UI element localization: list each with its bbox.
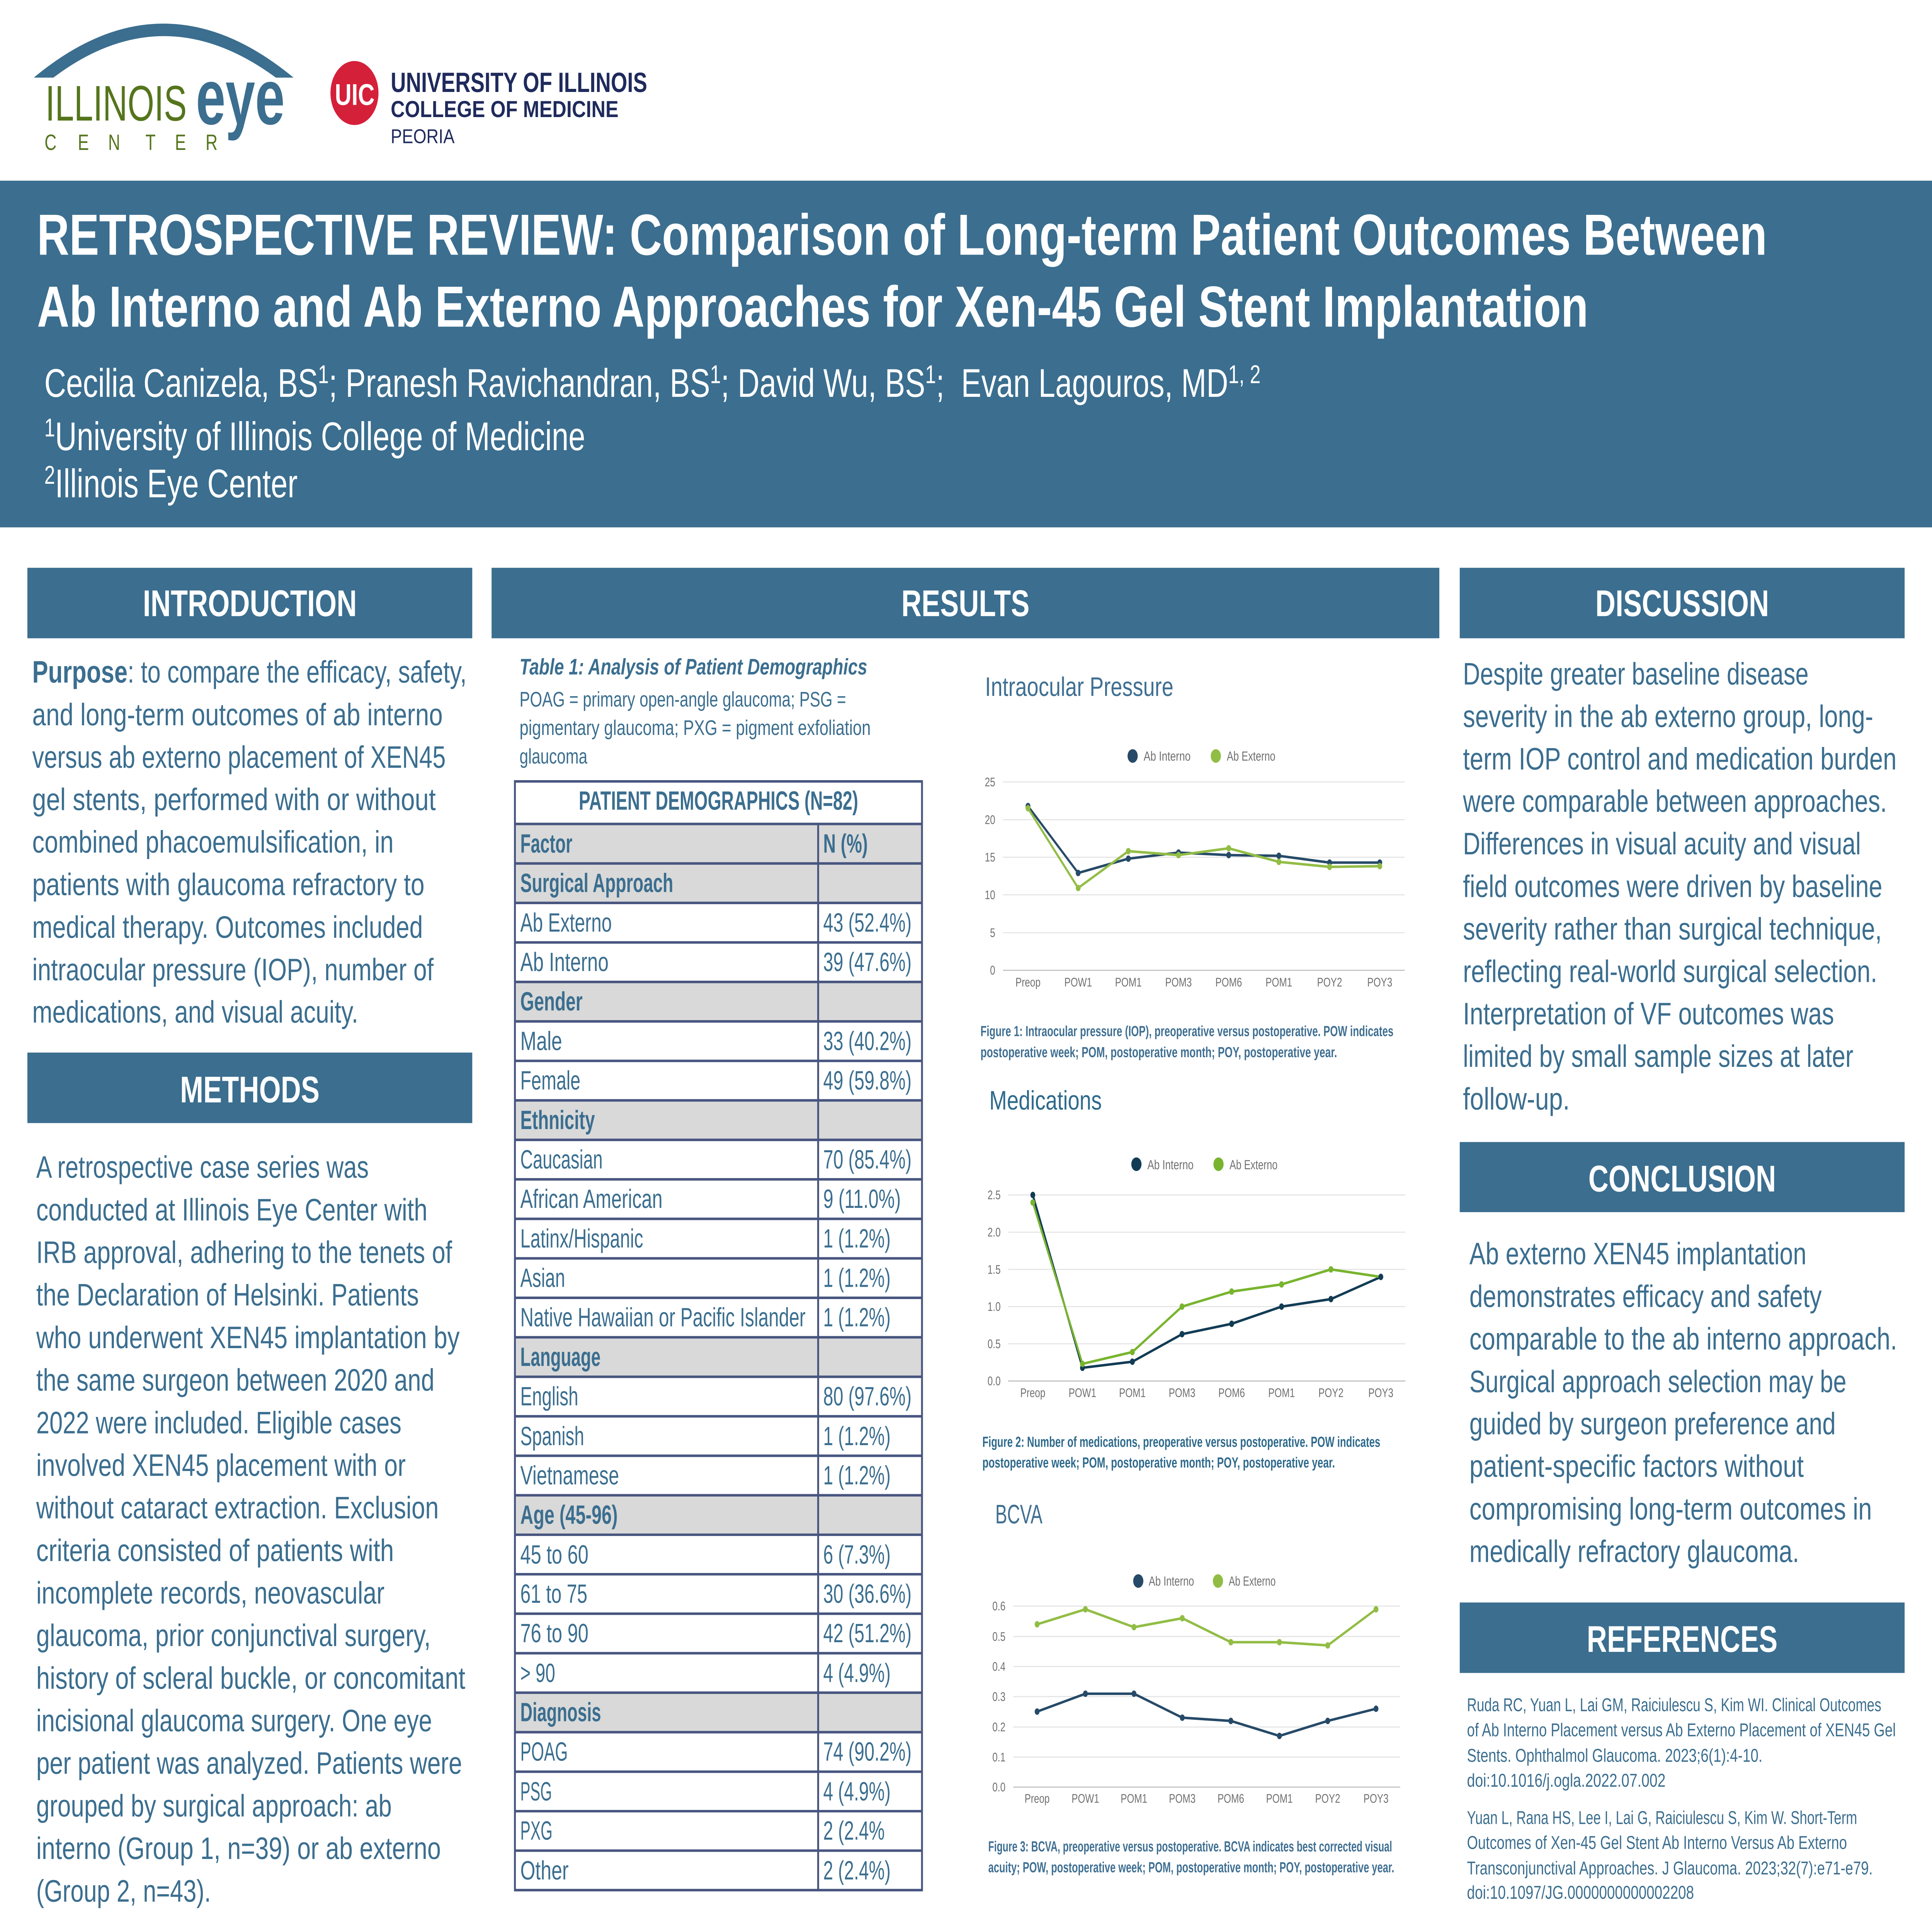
affiliation 2: Illinois Eye Center [55, 461, 298, 506]
logo: Illinois Eye Center [34, 24, 294, 155]
table: patient demographics: 1 (1.2%) [823, 1461, 891, 1490]
text: discussion: Differences in visual acuity and visual [1463, 827, 1861, 861]
table: patient demographics: Age (45-96) [520, 1500, 618, 1529]
panel: intraocular pressure chart: Intraocular Pressure [985, 672, 1173, 702]
table: patient demographics: Vietnamese [520, 1461, 619, 1490]
legend: Ab Interno [1144, 749, 1190, 764]
axis labels: Preop [1015, 975, 1041, 989]
axis labels: 0.5 [988, 1337, 1001, 1351]
axis labels: 0.1 [992, 1750, 1005, 1764]
table: patient demographics: 39 (47.6%) [823, 947, 912, 977]
axis labels: 15 [985, 850, 995, 864]
table: patient demographics: Gender [520, 986, 583, 1016]
panel: BCVA chart: BCVA [995, 1499, 1043, 1529]
table: patient demographics: Female [520, 1065, 580, 1095]
authors: ; Pranesh Ravichandran, BS [329, 361, 710, 405]
table: patient demographics: Language [520, 1342, 600, 1372]
axis labels: 0.0 [988, 1374, 1001, 1388]
text: discussion [1463, 656, 1896, 1116]
legend: Ab Interno [1147, 1157, 1194, 1172]
axis labels: 0.3 [992, 1690, 1005, 1704]
table: patient demographics: N (%) [823, 828, 868, 858]
text: methods: interno (Group 1, n=39) or ab externo [36, 1831, 441, 1866]
legend [1128, 749, 1276, 764]
text: conclusion: guided by surgeon preference and [1469, 1406, 1836, 1441]
text: purpose: and long-term outcomes of ab interno [32, 697, 443, 732]
text: purpose: intraocular pressure (IOP), number of [32, 952, 434, 987]
text: methods: IRB approval, adhering to the tenets of [36, 1235, 452, 1270]
text: conclusion [1469, 1236, 1897, 1569]
table title and note: Table 1: Analysis of Patient Demographics [519, 655, 867, 679]
table: patient demographics: 45 to 60 [520, 1539, 588, 1569]
caption: figure 1: Figure 1: Intraocular pressure (IOP), preoperative versus postoperative. POW indicates [981, 1023, 1393, 1039]
caption: figure 1 [981, 1023, 1393, 1060]
heading: methods: METHODS [180, 1069, 320, 1111]
table: patient demographics: Ethnicity [520, 1105, 595, 1135]
axis labels: POY3 [1367, 975, 1392, 989]
text: methods: grouped by surgical approach: ab [36, 1789, 392, 1823]
table: patient demographics: 1 (1.2%) [823, 1224, 891, 1253]
text: discussion: severity in the ab externo group, long- [1463, 699, 1873, 734]
logo: Illinois Eye Center: CENTER [44, 130, 218, 155]
axis labels: 0.0 [992, 1780, 1005, 1794]
text: discussion: limited by small sample sizes at later [1463, 1039, 1854, 1074]
table: patient demographics: Spanish [520, 1421, 584, 1451]
table: patient demographics: 1 (1.2%) [823, 1302, 891, 1332]
axis labels: 1.0 [988, 1300, 1001, 1314]
logo: Illinois Eye Center: ILLINOIS [45, 75, 187, 131]
text: methods: who underwent XEN45 implantation by [36, 1320, 460, 1355]
text: methods [36, 1150, 465, 1908]
table: patient demographics: PSG [520, 1776, 552, 1806]
table: patient demographics: Ab Externo [520, 908, 612, 937]
axis labels: 25 [985, 775, 995, 789]
axis labels [988, 1188, 1393, 1400]
axis labels: POM1 [1268, 1386, 1295, 1400]
axis labels: Preop [1020, 1386, 1045, 1400]
table: patient demographics: Ab Interno [520, 947, 609, 977]
axis labels: POM1 [1266, 1792, 1293, 1806]
text: purpose [32, 655, 467, 1029]
legend [1133, 1574, 1276, 1588]
axis labels: POM3 [1169, 1386, 1195, 1400]
text: purpose: medications, and visual acuity. [32, 995, 358, 1029]
table: patient demographics: Caucasian [520, 1145, 603, 1174]
table: patient demographics [515, 781, 922, 1890]
affiliation 1: University of Illinois College of Medicine [55, 414, 585, 459]
caption: figure 2 [982, 1434, 1380, 1471]
table: patient demographics: 33 (40.2%) [823, 1026, 912, 1056]
heading: introduction [27, 568, 472, 638]
table title and note [519, 655, 871, 768]
axis labels: POM1 [1121, 1792, 1147, 1806]
heading: methods [27, 1053, 472, 1123]
text: references: Transconjunctival Approaches. J Glaucoma. 2023;32(7):e71-e79. [1467, 1858, 1873, 1879]
legend: Ab Externo [1229, 1574, 1276, 1588]
series: ab interno [1035, 1690, 1378, 1739]
table: patient demographics: 2 (2.4% [823, 1816, 885, 1845]
table: patient demographics: 30 (36.6%) [823, 1579, 912, 1609]
axis labels: POY3 [1368, 1386, 1393, 1400]
axis labels: 20 [985, 813, 995, 827]
table title and note: pigmentary glaucoma; PXG = pigment exfoliation [519, 716, 871, 740]
text: conclusion: demonstrates efficacy and safety [1469, 1279, 1822, 1314]
text: discussion: were comparable between approaches. [1463, 784, 1887, 819]
authors: 1 [710, 360, 721, 389]
text: methods: (Group 2, n=43). [36, 1874, 211, 1908]
authors: 1 [925, 360, 936, 389]
caption: figure 3: acuity; POW, postoperative week; POM, postoperative month; POY, postoperative year. [988, 1859, 1394, 1876]
axis labels: 0 [990, 964, 995, 978]
text: conclusion: Ab externo XEN45 implantation [1469, 1236, 1806, 1271]
text: conclusion: medically refractory glaucoma. [1469, 1534, 1799, 1569]
text: conclusion: compromising long-term outcomes in [1469, 1492, 1872, 1526]
axis labels [992, 1599, 1389, 1806]
text: purpose: patients with glaucoma refractory to [32, 867, 425, 902]
table: patient demographics: English [520, 1381, 578, 1411]
table: patient demographics: Other [520, 1855, 569, 1885]
panel: BCVA chart [988, 1499, 1400, 1876]
panel: introduction [27, 568, 472, 1029]
logo: UIC College of Medicine Peoria: UIC [335, 78, 374, 111]
table: patient demographics: Surgical Approach [520, 868, 673, 898]
table: patient demographics: 4 (4.9%) [823, 1776, 891, 1806]
affiliation 2: 2 [44, 461, 55, 490]
panel: medications chart [982, 1085, 1406, 1471]
text: methods: incisional glaucoma surgery. One eye [36, 1703, 432, 1738]
table: patient demographics: Asian [520, 1263, 565, 1293]
axis labels: 0.2 [992, 1720, 1005, 1734]
text: references: doi:10.1016/j.ogla.2022.07.002 [1467, 1770, 1665, 1791]
text: discussion: reflecting real-world surgical selection. [1463, 954, 1877, 989]
legend: Ab Externo [1227, 749, 1276, 764]
axis labels: POY2 [1315, 1792, 1340, 1806]
table: patient demographics: 49 (59.8%) [823, 1065, 912, 1095]
text: conclusion: Surgical approach selection may be [1469, 1364, 1846, 1399]
text: purpose: versus ab externo placement of XEN45 [32, 740, 446, 775]
text: discussion: term IOP control and medication burden [1463, 742, 1896, 776]
table title and note: POAG = primary open-angle glaucoma; PSG = [519, 688, 846, 711]
panel: references [1460, 1602, 1905, 1903]
text: purpose: medical therapy. Outcomes included [32, 910, 423, 944]
text: discussion: follow-up. [1463, 1082, 1570, 1116]
text: methods: the same surgeon between 2020 and [36, 1363, 434, 1398]
legend [1131, 1157, 1277, 1172]
axis labels: 0.6 [992, 1599, 1005, 1613]
text: conclusion: patient-specific factors without [1469, 1449, 1804, 1484]
heading: conclusion [1460, 1142, 1905, 1212]
title [37, 202, 1767, 339]
table: patient demographics: 76 to 90 [520, 1618, 588, 1648]
table: patient demographics: 80 (97.6%) [823, 1381, 912, 1411]
axis labels: POY2 [1317, 975, 1342, 989]
table: patient demographics: Native Hawaiian or Pacific Islander [520, 1302, 806, 1332]
text: references: Stents. Ophthalmol Glaucoma. 2023;6(1):4-10. [1467, 1745, 1762, 1766]
heading: results [492, 568, 1439, 638]
heading: references [1460, 1602, 1905, 1673]
table: patient demographics: Male [520, 1026, 562, 1056]
affiliation 1: 1 [44, 413, 55, 442]
axis labels: POY2 [1318, 1386, 1344, 1400]
text: references: doi:10.1097/JG.0000000000002208 [1467, 1882, 1694, 1903]
series: ab interno [1031, 1192, 1381, 1371]
text: discussion: Interpretation of VF outcomes was [1463, 997, 1834, 1031]
table: patient demographics: Factor [520, 828, 572, 858]
axis labels: 10 [985, 888, 995, 902]
text: references: Yuan L, Rana HS, Lee I, Lai G, Raiciulescu S, Kim W. Short-Term [1467, 1808, 1857, 1828]
text: references [1467, 1695, 1896, 1903]
axis labels: POW1 [1064, 975, 1092, 989]
table: patient demographics: > 90 [520, 1658, 555, 1688]
axis labels: POW1 [1071, 1792, 1099, 1806]
series: ab interno [1026, 803, 1382, 876]
text: references: of Ab Interno Placement versus Ab Externo Placement of XEN45 Gel [1467, 1720, 1896, 1741]
axis labels: 2.5 [988, 1188, 1001, 1202]
axis labels: Preop [1025, 1792, 1049, 1806]
heading: conclusion: CONCLUSION [1588, 1158, 1776, 1200]
text: methods: 2022 were included. Eligible cases [36, 1405, 401, 1440]
text: methods: the Declaration of Helsinki. Patients [36, 1277, 419, 1312]
text: purpose: Purpose: to compare the efficacy, safety, [32, 655, 467, 689]
logo: UIC College of Medicine Peoria: PEORIA [391, 125, 455, 147]
text: methods: incomplete records, neovascular [36, 1576, 384, 1611]
table: patient demographics: Diagnosis [520, 1697, 601, 1727]
text: references: Outcomes of Xen-45 Gel Stent Ab Interno Versus Ab Externo [1467, 1833, 1847, 1853]
title: Ab Interno and Ab Externo Approaches for Xen-45 Gel Stent Implantation [37, 274, 1588, 339]
table: patient demographics: Latinx/Hispanic [520, 1224, 643, 1253]
heading: discussion [1460, 568, 1905, 638]
text: conclusion: comparable to the ab interno approach. [1469, 1321, 1897, 1356]
panel: methods [27, 1053, 472, 1908]
text: methods: conducted at Illinois Eye Center with [36, 1192, 427, 1227]
authors: ; David Wu, BS [721, 361, 925, 405]
logo: UIC College of Medicine Peoria: UNIVERSITY OF ILLINOIS [391, 66, 647, 98]
panel: conclusion [1460, 1142, 1905, 1569]
axis labels: POM3 [1169, 1792, 1196, 1806]
table: patient demographics: 9 (11.0%) [823, 1184, 901, 1214]
table: patient demographics: 1 (1.2%) [823, 1263, 891, 1293]
text: methods: history of scleral buckle, or concomitant [36, 1661, 465, 1696]
text: methods: glaucoma, prior conjunctival surgery, [36, 1618, 431, 1653]
axis labels [985, 775, 1392, 989]
text: purpose: combined phacoemulsification, in [32, 825, 394, 859]
authors: ; Evan Lagouros, MD [936, 361, 1228, 405]
heading: results: RESULTS [901, 583, 1029, 624]
text: discussion: severity rather than surgical technique, [1463, 912, 1882, 946]
text: discussion: field outcomes were driven by baseline [1463, 869, 1883, 904]
caption: figure 3 [988, 1838, 1394, 1876]
logo: UIC College of Medicine Peoria [330, 61, 647, 147]
table: patient demographics: 43 (52.4%) [823, 908, 912, 937]
panel: discussion [1460, 568, 1905, 1116]
panel: intraocular pressure chart [981, 672, 1405, 1060]
legend: Ab Externo [1230, 1157, 1277, 1172]
heading: references: REFERENCES [1587, 1619, 1777, 1660]
series: ab externo [1031, 1199, 1383, 1367]
logo: Illinois Eye Center: eye [196, 53, 285, 141]
text: methods: involved XEN45 placement with or [36, 1448, 406, 1483]
authors: Cecilia Canizela, BS [44, 361, 316, 405]
axis labels: POW1 [1069, 1386, 1096, 1400]
authors: 1 [318, 360, 329, 389]
table: patient demographics: 74 (90.2%) [823, 1736, 912, 1766]
axis labels: 2.0 [988, 1225, 1001, 1239]
table: patient demographics: 70 (85.4%) [823, 1145, 912, 1174]
axis labels: 0.4 [992, 1660, 1005, 1673]
axis labels: 5 [990, 926, 995, 940]
table: patient demographics: 1 (1.2%) [823, 1421, 891, 1451]
text: discussion: Despite greater baseline disease [1463, 656, 1809, 691]
text: purpose: gel stents, performed with or without [32, 782, 436, 817]
text: methods: without cataract extraction. Exclusion [36, 1490, 439, 1525]
logo: UIC College of Medicine Peoria: COLLEGE OF MEDICINE [391, 96, 619, 122]
caption: figure 1: postoperative week; POM, postoperative month; POY, postoperative year. [981, 1044, 1337, 1060]
text: methods: per patient was analyzed. Patients were [36, 1746, 462, 1781]
series: ab externo [1026, 805, 1382, 891]
caption: figure 3: Figure 3: BCVA, preoperative versus postoperative. BCVA indicates best corrected visual [988, 1838, 1392, 1855]
axis labels: POY3 [1364, 1792, 1389, 1806]
axis labels: POM3 [1165, 975, 1192, 989]
table: patient demographics: 61 to 75 [520, 1579, 587, 1609]
text: references: Ruda RC, Yuan L, Lai GM, Raiciulescu S, Kim WI. Clinical Outcomes [1467, 1695, 1881, 1716]
table: patient demographics: 4 (4.9%) [823, 1658, 891, 1688]
table: patient demographics: PXG [520, 1816, 553, 1845]
caption: figure 2: postoperative week; POM, postoperative month; POY, postoperative year. [982, 1454, 1335, 1471]
header band: title and authors [0, 181, 1932, 527]
table: patient demographics: 6 (7.3%) [823, 1539, 891, 1569]
title: RETROSPECTIVE REVIEW: Comparison of Long-term Patient Outcomes Between [37, 202, 1767, 267]
axis labels: POM6 [1218, 1792, 1244, 1806]
table: patient demographics: 2 (2.4%) [823, 1855, 891, 1885]
table title and note: glaucoma [519, 745, 587, 768]
authors: 1, 2 [1228, 360, 1260, 389]
text: methods: A retrospective case series was [36, 1150, 369, 1185]
table: patient demographics: POAG [520, 1736, 568, 1766]
heading: introduction: INTRODUCTION [143, 583, 357, 624]
text: methods: criteria consisted of patients with [36, 1533, 394, 1568]
table: patient demographics: African American [520, 1184, 663, 1214]
table: patient demographics: PATIENT DEMOGRAPHICS (N=82) [579, 786, 858, 815]
caption: figure 2: Figure 2: Number of medications, preoperative versus postoperative. POW indicates [982, 1434, 1380, 1450]
axis labels: POM1 [1115, 975, 1142, 989]
series: ab externo [1035, 1606, 1378, 1649]
legend: Ab Interno [1149, 1574, 1194, 1588]
axis labels: 1.5 [988, 1263, 1001, 1277]
axis labels: POM6 [1215, 975, 1242, 989]
axis labels: POM6 [1218, 1386, 1245, 1400]
panel: medications chart: Medications [989, 1085, 1102, 1115]
table: patient demographics: 42 (51.2%) [823, 1618, 912, 1648]
heading: discussion: DISCUSSION [1595, 583, 1769, 624]
axis labels: 0.5 [992, 1630, 1005, 1644]
axis labels: POM1 [1265, 975, 1292, 989]
axis labels: POM1 [1119, 1386, 1146, 1400]
